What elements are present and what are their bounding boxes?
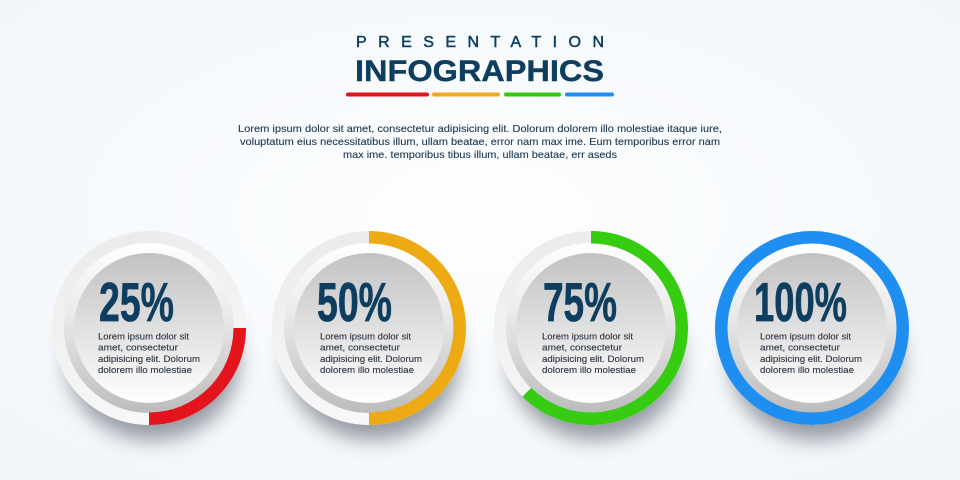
description xyxy=(542,330,644,375)
description: Lorem ipsum dolor sit xyxy=(320,330,411,342)
description xyxy=(98,330,200,375)
description: adipisicing elit. Dolorum xyxy=(760,353,862,364)
description: adipisicing elit. Dolorum xyxy=(320,353,422,364)
value: 75%: 75% xyxy=(543,271,617,333)
intro text block: voluptatum eius necessitatibus illum, ullam beatae, error nam max ime. Eum temporibus error nam xyxy=(240,137,720,148)
progress arc: 75% green xyxy=(522,231,688,425)
progress arc: 100% blue xyxy=(721,237,903,419)
progress arc: 25% red xyxy=(149,328,246,425)
description: dolorem illo molestiae xyxy=(320,364,414,375)
description: dolorem illo molestiae xyxy=(542,364,636,375)
value: 100%: 100% xyxy=(754,271,847,333)
progress arc: 50% amber xyxy=(369,231,466,425)
panel: 25% xyxy=(52,231,246,440)
panel: 75% xyxy=(494,231,688,440)
description: amet, consectetur xyxy=(760,342,840,352)
title xyxy=(355,34,604,88)
description: amet, consectetur xyxy=(98,342,178,352)
description: adipisicing elit. Dolorum xyxy=(542,353,644,364)
description: amet, consectetur xyxy=(542,342,622,352)
description: adipisicing elit. Dolorum xyxy=(98,353,200,364)
intro text block: max ime. temporibus tibus illum, ullam beatae, err aseds xyxy=(343,150,617,161)
value: 25%: 25% xyxy=(99,271,174,333)
description: dolorem illo molestiae xyxy=(98,364,192,375)
description: amet, consectetur xyxy=(320,342,400,352)
intro text block: Lorem ipsum dolor sit amet, consectetur adipisicing elit. Dolorum dolorem illo molestiae itaque iure, xyxy=(238,124,722,135)
title line: presentation: PRESENTATION xyxy=(356,34,604,51)
panel: 100% xyxy=(715,231,909,440)
description xyxy=(320,330,422,375)
description xyxy=(760,330,862,375)
title colour bars xyxy=(348,92,612,96)
intro text block xyxy=(238,124,722,161)
description: Lorem ipsum dolor sit xyxy=(760,330,851,342)
title line: infographics: INFOGRAPHICS xyxy=(355,55,604,88)
description: Lorem ipsum dolor sit xyxy=(98,330,189,342)
value: 50%: 50% xyxy=(317,271,392,333)
description: dolorem illo molestiae xyxy=(760,364,854,375)
panel: 50% xyxy=(272,231,466,440)
description: Lorem ipsum dolor sit xyxy=(542,330,633,342)
